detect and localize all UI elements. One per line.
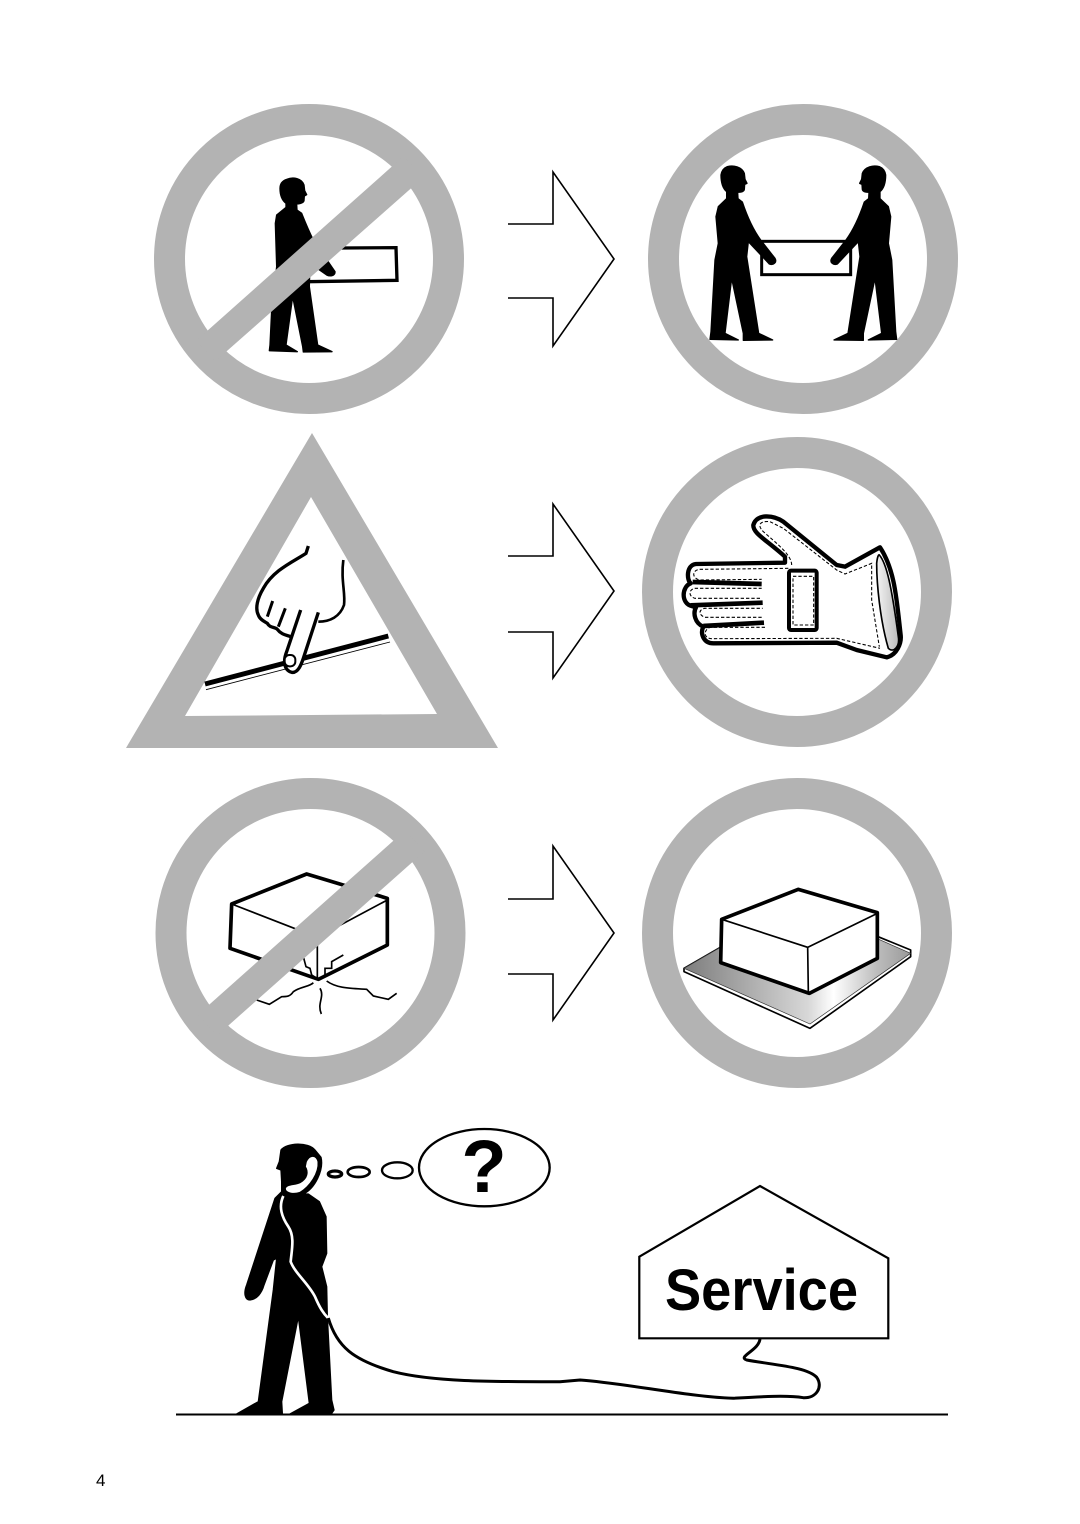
ring: circle 6: [658, 794, 936, 1072]
arrow 1: [508, 172, 614, 346]
ground line: [176, 1414, 948, 1416]
panel: allowed, two people carrying: [664, 120, 942, 398]
icon: box on plate: [684, 889, 911, 1028]
icon: man on telephone: [237, 1144, 334, 1414]
ring: circle 2: [664, 120, 942, 398]
triangle: warning sign: [126, 433, 498, 748]
panel: wear gloves: [658, 452, 936, 732]
panel: warning triangle, finger on sharp edge: [126, 433, 498, 748]
icon: box cracking the floor: [230, 874, 397, 1014]
arrow 2: [508, 504, 614, 678]
icon: two men carrying panel: [710, 166, 897, 340]
icon: hand touching sharp edge: [205, 546, 390, 690]
ring: prohibition circle 1: [170, 120, 448, 398]
panel: prohibited, box on bare floor: [171, 794, 450, 1072]
slash: prohibition bar 5: [198, 830, 424, 1036]
icon: protective glove: [684, 516, 901, 657]
panel: service figure with phone: [176, 1125, 948, 1414]
service label: Service: [665, 1258, 858, 1323]
question mark: ?: [461, 1125, 507, 1208]
service house: [639, 1186, 888, 1338]
telephone cord: [328, 1318, 819, 1398]
thought bubbles: [328, 1129, 550, 1206]
ring: prohibition circle 5: [171, 794, 450, 1072]
icon: single man carrying panel: [269, 178, 397, 352]
ring: circle 4: [658, 452, 936, 732]
page number: 4: [96, 1471, 105, 1490]
panel: box on protective underlay: [658, 794, 936, 1072]
panel: prohibited, one person carrying: [170, 120, 448, 398]
slash: prohibition bar 1: [196, 156, 423, 361]
arrow 3: [508, 846, 614, 1020]
